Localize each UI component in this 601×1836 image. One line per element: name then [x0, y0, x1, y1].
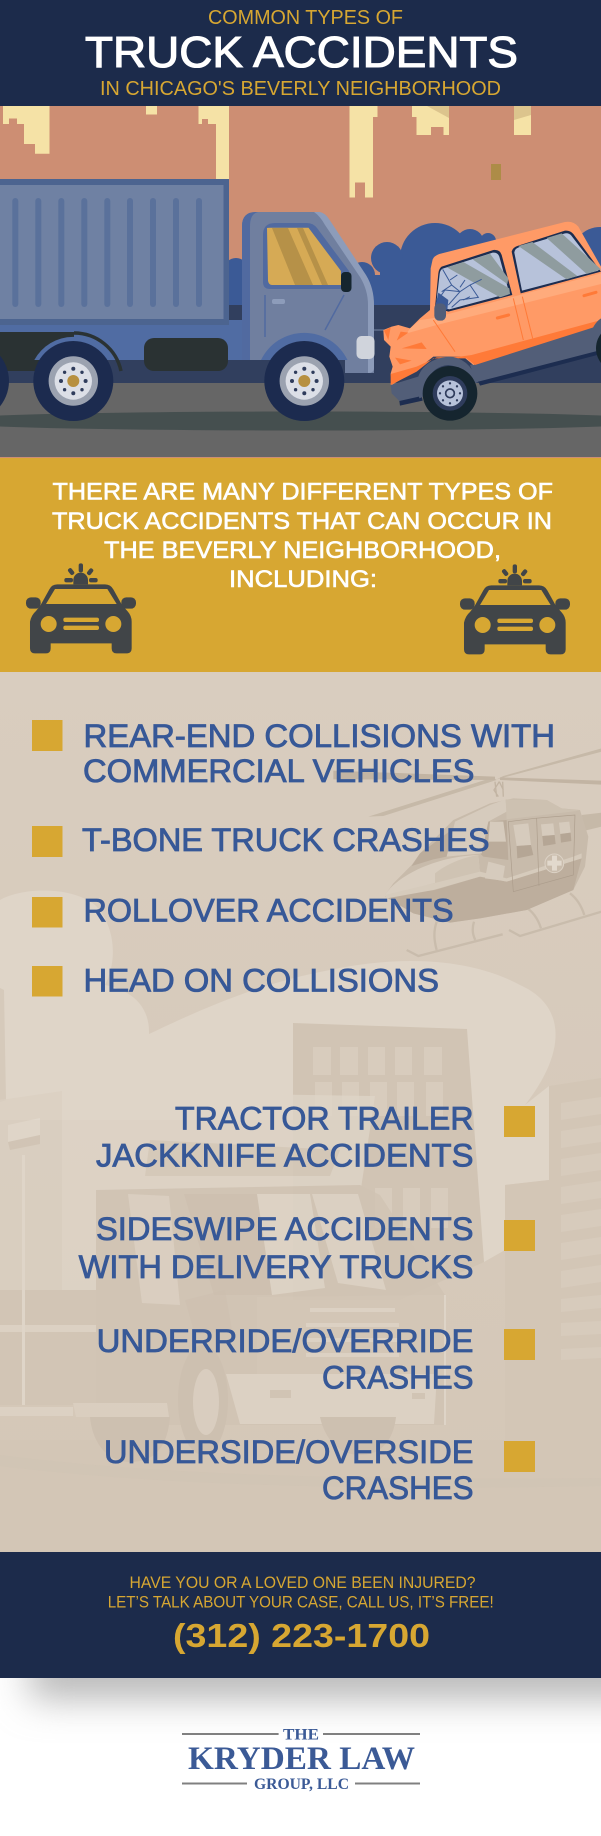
logo: The Kryder Law Group: KRYDER LAW	[188, 1741, 415, 1777]
list item: tractor trailer: TRACTOR TRAILER	[175, 1100, 474, 1136]
list item: underride	[97, 1323, 535, 1396]
front wheel arch	[261, 333, 348, 360]
list item: rollover: ROLLOVER ACCIDENTS	[84, 892, 454, 928]
list item: rear-end collisions	[32, 718, 555, 789]
subheading: location: IN CHICAGO'S BEVERLY NEIGHBORHOOD	[100, 78, 501, 100]
list item: underride: UNDERRIDE/OVERRIDE	[97, 1323, 473, 1359]
list item: t-bone: T-BONE TRUCK CRASHES	[82, 822, 490, 858]
footer question: HAVE YOU OR A LOVED ONE BEEN INJURED?	[130, 1573, 476, 1592]
rear truck wheel	[33, 341, 113, 421]
title: truck accidents: TRUCK ACCIDENTS	[85, 28, 518, 77]
car front window	[435, 250, 512, 312]
list item: underside	[104, 1434, 535, 1506]
logo: The Kryder Law Group	[182, 1726, 420, 1793]
truck	[0, 179, 374, 421]
intro text	[52, 478, 553, 593]
car light band	[432, 273, 601, 325]
phone number: (312) 223-1700	[173, 1617, 430, 1654]
helicopter skids	[407, 893, 601, 956]
list item: tractor trailer	[96, 1100, 535, 1174]
background: light clouds	[0, 890, 556, 1262]
panel: gold intro	[0, 458, 601, 672]
helicopter medical cross	[545, 854, 564, 873]
logo: The Kryder Law Group: GROUP, LLC	[254, 1776, 349, 1793]
road shadow	[0, 412, 601, 430]
car damage	[384, 327, 427, 364]
ghost truck wheel	[178, 1345, 228, 1455]
car lower stripe	[391, 320, 601, 385]
cargo box	[0, 179, 229, 325]
panel: footer call to action	[0, 1552, 601, 1678]
car side mirror	[434, 303, 446, 321]
shattered glass cracks	[437, 269, 482, 307]
truck headlight	[356, 336, 374, 359]
heading: common types of: COMMON TYPES OF	[208, 7, 403, 29]
ghost truck hood and grille	[257, 1295, 445, 1380]
background: road band	[0, 1455, 601, 1488]
list item: underside: CRASHES	[322, 1470, 474, 1506]
icon: police car left	[26, 563, 136, 653]
background: ghosted truck	[0, 1091, 445, 1462]
car door lines and handles	[433, 297, 533, 352]
list item: underride: CRASHES	[322, 1360, 474, 1396]
illustration: truck and car collision	[0, 106, 601, 458]
background: left wall sliver	[0, 988, 6, 1102]
truck mirror	[341, 272, 352, 292]
panel: beige list background	[0, 672, 601, 1552]
car body	[383, 222, 601, 385]
city skyline windows	[3, 106, 531, 198]
car rocker panels	[391, 325, 601, 401]
footer drop shadow	[30, 1650, 601, 1698]
fuel tank	[144, 338, 228, 371]
intro text: THERE ARE MANY DIFFERENT TYPES OF	[52, 478, 553, 506]
panel: header	[0, 0, 601, 106]
car rear window	[512, 231, 601, 293]
list item: sideswipe	[79, 1211, 535, 1285]
background: right buildings	[0, 1078, 601, 1552]
intro text: THE BEVERLY NEIGHBORHOOD,	[104, 537, 501, 564]
truck chassis	[0, 320, 243, 360]
background: helicopter	[333, 748, 601, 956]
car wheels	[423, 366, 477, 421]
footer invitation: LET’S TALK ABOUT YOUR CASE, CALL US, IT’S FREE!	[108, 1592, 494, 1611]
list item: sideswipe: SIDESWIPE ACCIDENTS	[96, 1211, 474, 1247]
helicopter tail	[582, 813, 601, 831]
car wheel arches	[417, 357, 478, 398]
intro text: INCLUDING:	[229, 566, 377, 593]
icon: police car right	[460, 564, 570, 654]
cab window	[263, 223, 349, 289]
list item: underside: UNDERSIDE/OVERSIDE	[104, 1434, 474, 1470]
front truck wheel	[264, 341, 344, 421]
list item: rear-end collisions: REAR-END COLLISIONS WITH	[84, 718, 555, 754]
background: middle building	[293, 1023, 484, 1300]
truck cab	[242, 212, 374, 373]
logo: The Kryder Law Group: THE	[283, 1726, 319, 1743]
dark band and road	[0, 305, 601, 383]
list item: tractor trailer: JACKKNIFE ACCIDENTS	[96, 1138, 474, 1174]
list item: sideswipe: WITH DELIVERY TRUCKS	[79, 1249, 473, 1285]
helicopter windows	[485, 822, 571, 881]
intro text: TRUCK ACCIDENTS THAT CAN OCCUR IN	[52, 508, 552, 535]
far left truck wheel	[0, 341, 9, 421]
ghost truck light bar	[145, 1140, 340, 1176]
ghost truck bumper	[226, 1374, 437, 1424]
bushes	[224, 223, 601, 306]
door details	[272, 299, 285, 304]
ghost truck cab	[96, 1185, 445, 1425]
helicopter body	[385, 798, 588, 923]
list item: rear-end collisions: COMMERCIAL VEHICLES	[83, 753, 475, 789]
list item: head on: HEAD ON COLLISIONS	[84, 962, 439, 998]
orange car	[370, 222, 601, 421]
